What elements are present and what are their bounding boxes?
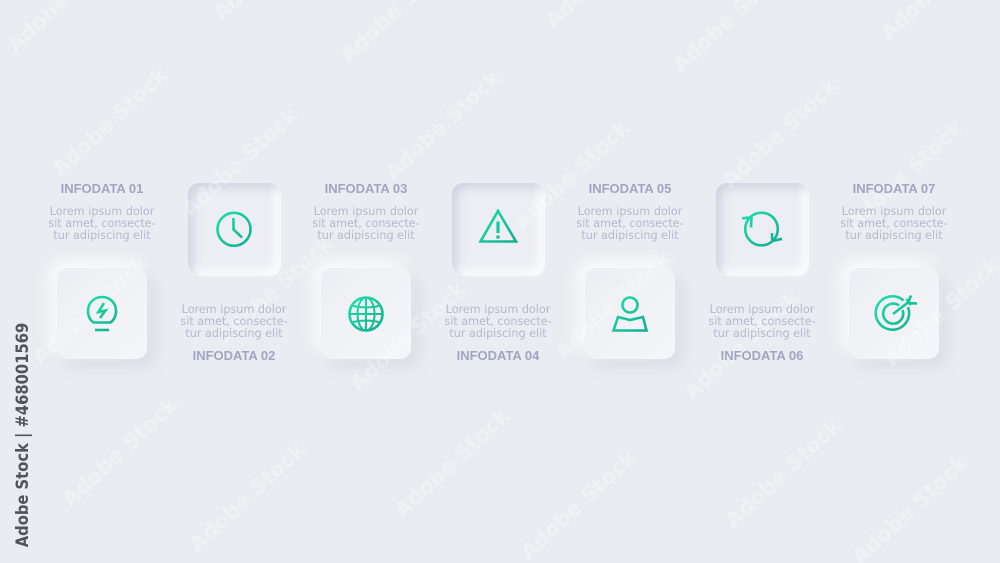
heading: infodata 02: INFODATA 02 (193, 348, 275, 363)
heading: infodata 04: INFODATA 04 (457, 348, 539, 363)
watermark: repeated adobe stock: Adobe Stock (178, 103, 302, 221)
card: raised with globe icon (321, 268, 411, 359)
icon: lightbulb (86, 296, 118, 332)
text block: step 03 (312, 205, 420, 242)
icon: clock (216, 212, 252, 248)
watermark: repeated adobe stock: Adobe Stock (185, 438, 309, 556)
heading: infodata 03: INFODATA 03 (325, 181, 407, 196)
text block: step 03: tur adipiscing elit (317, 229, 415, 242)
heading: infodata 01: INFODATA 01 (61, 181, 143, 196)
text block: step 05 (576, 205, 684, 242)
watermark: repeated adobe stock: Adobe Stock (721, 414, 845, 532)
text block: step 02: sit amet, consecte- (180, 315, 288, 328)
text block: step 07: Lorem ipsum dolor (842, 205, 946, 218)
panel: step 02 (180, 183, 288, 363)
text block: step 06: sit amet, consecte- (708, 315, 816, 328)
panel: step 04 (444, 183, 552, 363)
card: raised with lightbulb icon (57, 268, 147, 359)
icon: globe (348, 296, 384, 332)
text block: step 01: sit amet, consecte- (48, 217, 156, 230)
icon: warning triangle (478, 208, 518, 243)
icon: refresh arrows (742, 211, 782, 247)
text block: step 05: sit amet, consecte- (576, 217, 684, 230)
watermark: repeated adobe stock: Adobe Stock (58, 393, 182, 511)
text block: step 07: sit amet, consecte- (840, 217, 948, 230)
text block: step 04: Lorem ipsum dolor (446, 303, 550, 316)
watermark: repeated adobe stock: Adobe Stock (510, 116, 634, 234)
text block: step 05: tur adipiscing elit (581, 229, 679, 242)
text block: step 04: sit amet, consecte- (444, 315, 552, 328)
heading: infodata 06: INFODATA 06 (721, 348, 803, 363)
stock id label: Adobe Stock | #468001569 (13, 323, 32, 547)
icon: person on map (612, 296, 648, 332)
text block: step 04: tur adipiscing elit (449, 327, 547, 340)
text block: step 01: tur adipiscing elit (53, 229, 151, 242)
watermark: repeated adobe stock: Adobe Stock (390, 404, 514, 522)
text block: step 04 (444, 303, 552, 340)
watermark: repeated adobe stock: Adobe Stock (551, 246, 675, 364)
heading: infodata 05: INFODATA 05 (589, 181, 671, 196)
text block: step 02: Lorem ipsum dolor (182, 303, 286, 316)
card: raised with target icon (849, 268, 939, 359)
panel: step 07 (840, 181, 948, 367)
text block: step 06: tur adipiscing elit (713, 327, 811, 340)
text block: step 06 (708, 303, 816, 340)
watermark: repeated adobe stock: Adobe Stock (381, 66, 505, 184)
text block: step 02: tur adipiscing elit (185, 327, 283, 340)
text block: step 05: Lorem ipsum dolor (578, 205, 682, 218)
watermark: repeated adobe stock: Adobe Stock (718, 74, 842, 192)
panel: step 03 (312, 181, 420, 367)
panel: step 05 (576, 181, 684, 367)
text block: step 03: sit amet, consecte- (312, 217, 420, 230)
watermark: repeated adobe stock: Adobe Stock (516, 446, 640, 563)
text block: step 07 (840, 205, 948, 242)
watermark: repeated adobe stock: Adobe Stock (48, 63, 172, 181)
text block: step 03: Lorem ipsum dolor (314, 205, 418, 218)
card: raised with person on map icon (585, 268, 675, 359)
text block: step 01 (48, 205, 156, 242)
watermark: repeated adobe stock: Adobe Stock (843, 116, 967, 234)
card: inset with clock icon (188, 183, 280, 275)
watermark: repeated adobe stock: Adobe Stock (346, 277, 470, 395)
text block: step 01: Lorem ipsum dolor (50, 205, 154, 218)
watermark: repeated adobe stock: Adobe Stock (213, 231, 337, 349)
heading: infodata 07: INFODATA 07 (853, 181, 935, 196)
panel: step 01 (48, 181, 156, 367)
card: inset with refresh icon (716, 183, 808, 275)
watermark: repeated adobe stock: Adobe Stock (28, 251, 152, 369)
panel: step 06 (708, 183, 816, 363)
text block: step 02 (180, 303, 288, 340)
card: inset with warning icon (452, 183, 544, 275)
watermark: repeated adobe stock: Adobe Stock (680, 286, 804, 404)
text block: step 07: tur adipiscing elit (845, 229, 943, 242)
text block: step 06: Lorem ipsum dolor (710, 303, 814, 316)
icon: target with arrow (874, 295, 918, 331)
